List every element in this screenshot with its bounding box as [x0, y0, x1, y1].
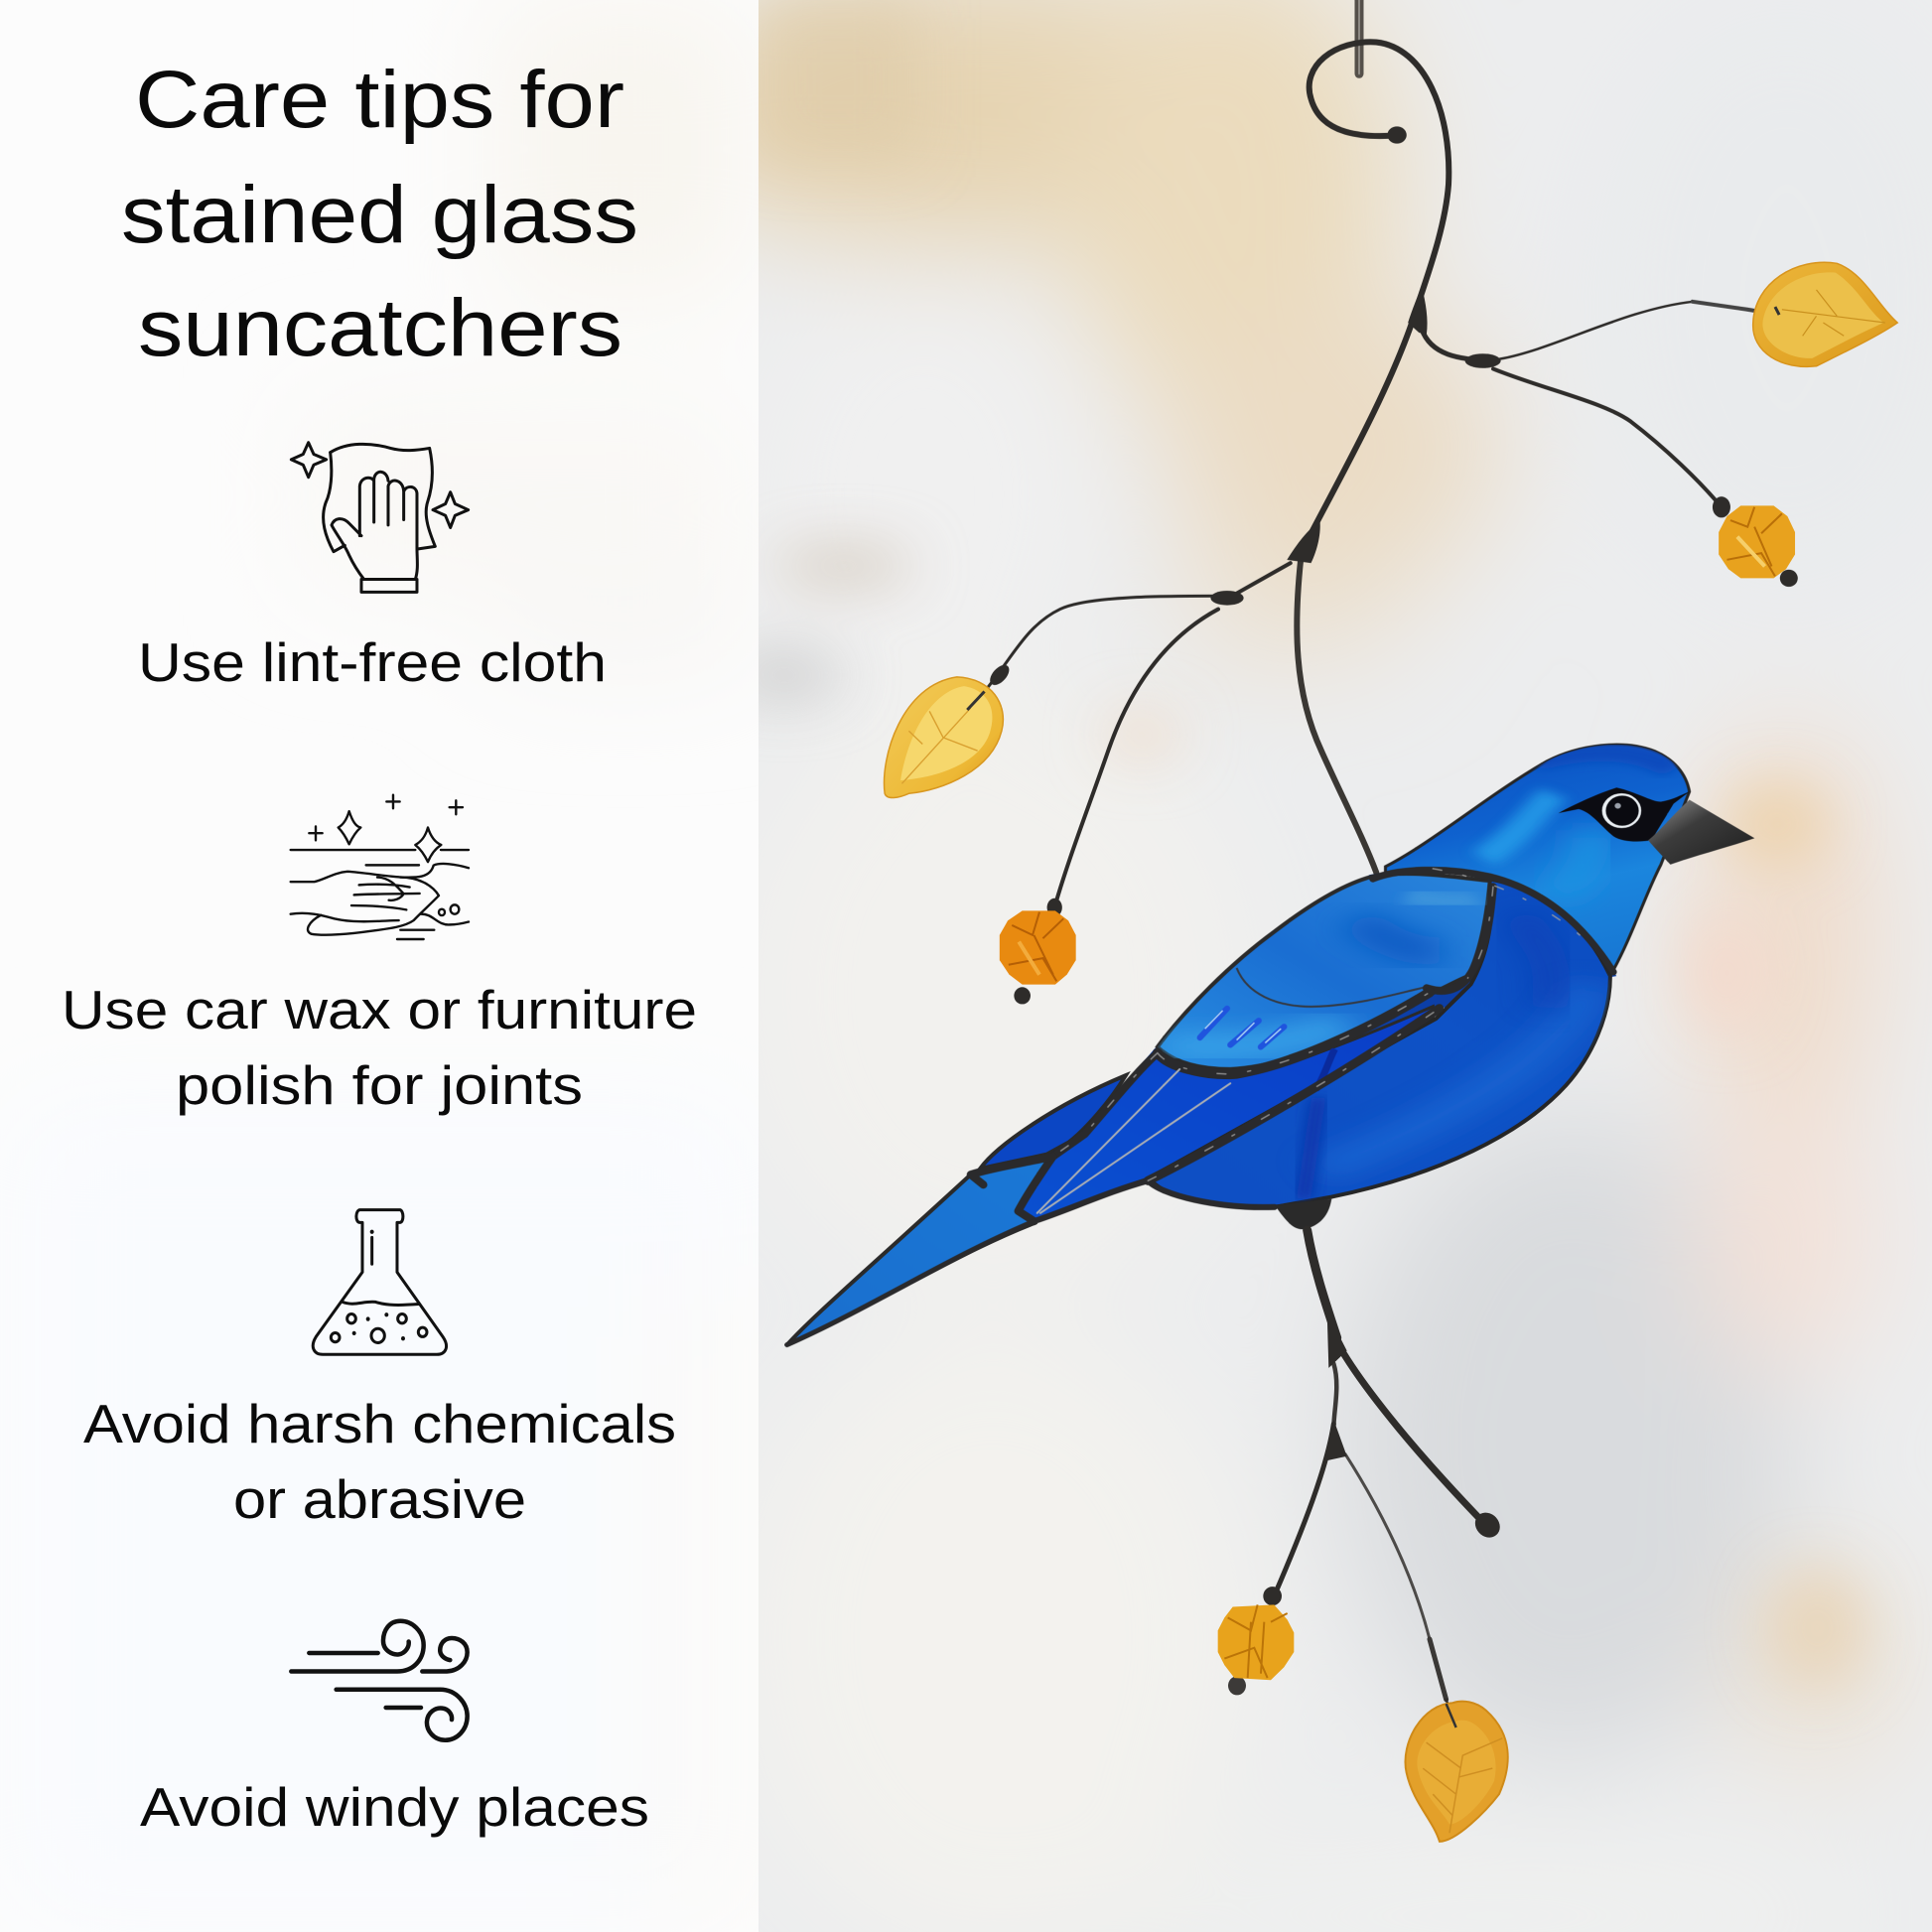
bird beak — [1648, 800, 1754, 865]
icon: hand with cloth — [291, 443, 469, 592]
bird tail — [787, 1155, 1056, 1345]
hanger hook and upper wire branches — [985, 0, 1798, 1005]
title: stained glass — [121, 170, 638, 260]
leaf: upper right — [1753, 262, 1897, 366]
leaf: lower — [1405, 1702, 1508, 1842]
label: avoid chemicals — [83, 1393, 676, 1530]
bird primaries — [1019, 1007, 1433, 1221]
bird lead lines — [787, 869, 1613, 1345]
icon: wind — [291, 1621, 468, 1740]
lower wire branches — [1228, 1230, 1502, 1727]
title: suncatchers — [138, 283, 622, 373]
label: lint-free cloth: Use lint-free cloth — [138, 631, 607, 693]
bird wing coverts — [1158, 874, 1490, 1069]
bead: left — [1000, 910, 1076, 985]
bird upper wing tip — [980, 1075, 1126, 1169]
bird eye mask — [1559, 787, 1690, 842]
icon: chemical flask — [313, 1210, 447, 1354]
label: wax or polish — [62, 979, 697, 1116]
icon: hand polishing surface — [291, 795, 469, 939]
bird foot solder knob — [1275, 1199, 1331, 1229]
title: Care tips for — [135, 55, 624, 145]
leaf: left — [885, 677, 1003, 798]
label: wax or polish: polish for joints — [176, 1054, 583, 1116]
bird body — [1148, 879, 1610, 1207]
label: avoid chemicals: Avoid harsh chemicals — [83, 1393, 676, 1454]
bead: upper right — [1719, 505, 1795, 578]
bird underlay — [1019, 872, 1616, 1221]
bird: stained glass — [787, 745, 1754, 1345]
photo background: blurred interior — [759, 0, 1924, 1781]
title — [121, 55, 638, 373]
label: wax or polish: Use car wax or furniture — [62, 979, 697, 1040]
panel: care tips — [0, 0, 759, 1932]
bead: lower — [1218, 1604, 1294, 1680]
label: avoid windy places: Avoid windy places — [140, 1776, 649, 1838]
bird head — [1385, 745, 1690, 970]
label: avoid chemicals: or abrasive — [233, 1468, 526, 1530]
